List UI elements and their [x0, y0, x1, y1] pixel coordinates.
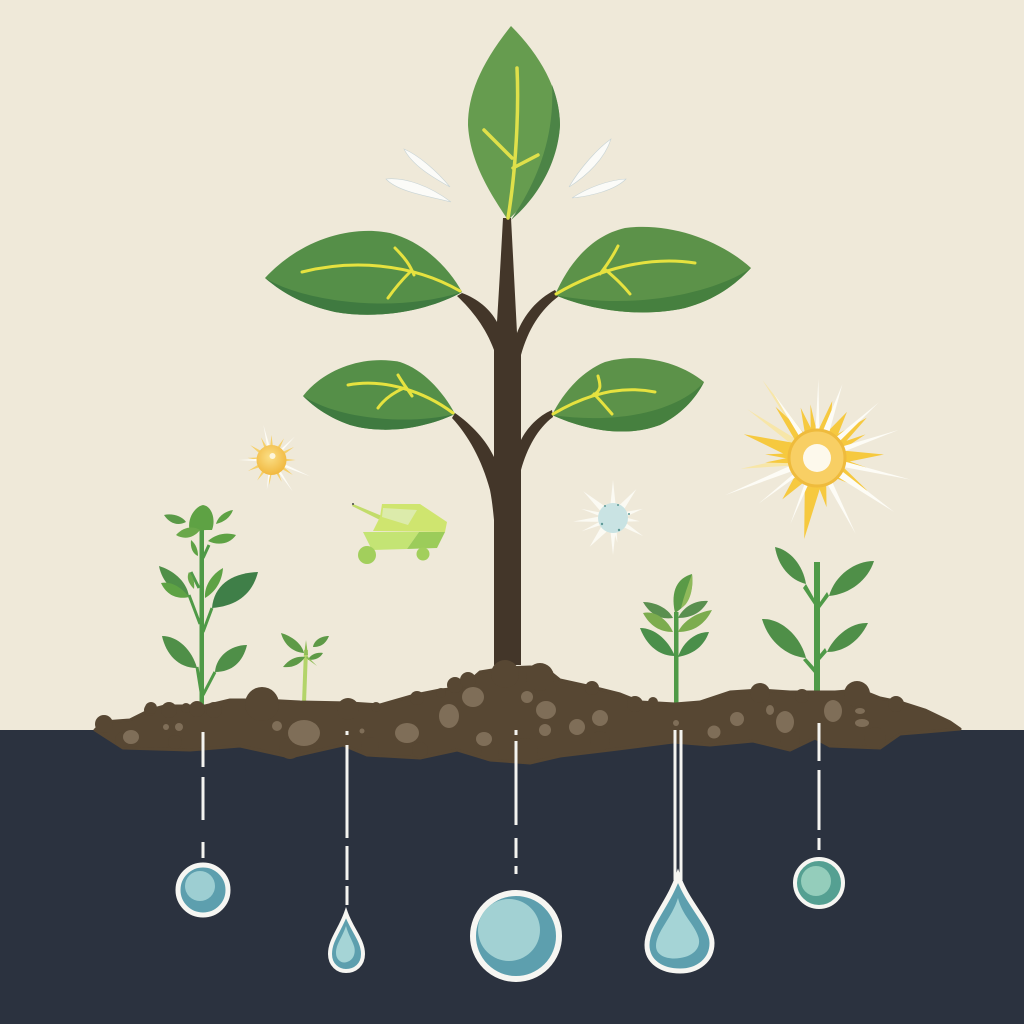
soil mound: [95, 660, 960, 764]
water drop: small teardrop: [330, 913, 363, 971]
upper right leaf: [555, 227, 751, 312]
soil lumps: [95, 660, 904, 764]
root line 4: [675, 730, 681, 880]
sparkle marks near top leaf: [386, 139, 626, 202]
central tree: [265, 26, 751, 665]
plant: far left sprout: [159, 505, 258, 708]
icon: pale sparkle orb: [573, 480, 645, 555]
lower right leaf: [552, 358, 704, 432]
icon: small sun: [238, 424, 311, 493]
top leaf: [468, 26, 560, 220]
upper left leaf: [265, 231, 462, 315]
root line 3: [514, 730, 518, 874]
background sky: [0, 0, 1024, 730]
icon: green cart: [352, 503, 447, 564]
water drop: green round: [795, 859, 843, 907]
plant: far right sprout: [762, 547, 874, 692]
plant: small seedling: [281, 633, 329, 703]
water drop: large teardrop: [647, 876, 712, 971]
water drop: round 1: [178, 865, 228, 915]
underground panel: [0, 730, 1024, 1024]
root line 5: [818, 723, 820, 850]
plant: right sprout: [640, 574, 712, 704]
soil pebbles: [123, 687, 869, 746]
lower left leaf: [303, 360, 455, 430]
root line 1: [202, 732, 204, 858]
icon: large sun: [724, 377, 911, 541]
root line 2: [346, 731, 348, 905]
water drop: large round: [473, 893, 559, 979]
trunk and branches: [452, 218, 559, 665]
